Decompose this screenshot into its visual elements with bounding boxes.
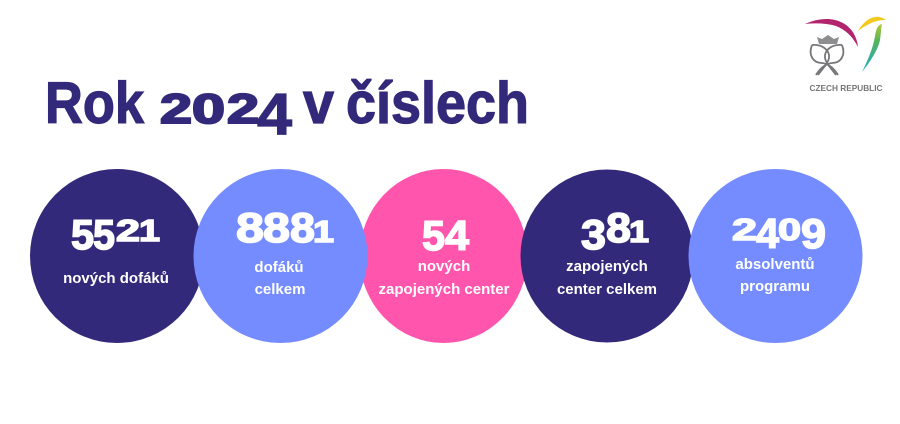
panel: 381 total centres <box>520 170 694 342</box>
title: Rok <box>45 71 145 136</box>
number: 4 <box>445 212 470 259</box>
title <box>45 71 529 147</box>
number: 1 <box>313 214 334 249</box>
icon: crown <box>817 35 839 44</box>
number: 3 <box>581 211 606 258</box>
label: zapojených <box>566 258 648 275</box>
panel: 54 new centres <box>360 169 528 343</box>
title: 4 <box>257 82 292 147</box>
panel: 2409 graduates <box>688 169 862 343</box>
title: v <box>303 71 334 136</box>
panel: 8881 total participants: celkem <box>255 281 305 298</box>
number: 0 <box>778 212 801 247</box>
icon: magenta wing <box>805 19 858 47</box>
logo: Czech Republic <box>805 17 886 93</box>
label: absolventů <box>735 256 815 273</box>
number: 8 <box>290 204 315 251</box>
icon: knot <box>811 45 843 75</box>
panel: 2409 graduates: programu <box>740 278 810 295</box>
number: 5 <box>71 211 94 258</box>
number: 1 <box>629 214 649 249</box>
number: 8 <box>606 204 631 251</box>
number: 5 <box>422 212 445 259</box>
number: 9 <box>801 210 826 257</box>
number: 1 <box>139 213 160 248</box>
number: 8 <box>236 204 264 251</box>
number: 4 <box>756 210 780 257</box>
title: 0 <box>192 85 225 132</box>
number: 2 <box>732 212 757 247</box>
number: 8 <box>263 204 290 251</box>
title: 2 <box>227 85 259 132</box>
panel: 381 total centres: center celkem <box>557 281 657 298</box>
number: 5 <box>93 211 115 258</box>
label: dofáků <box>254 259 304 276</box>
icon: green-blue tail <box>862 24 882 72</box>
panel: 8881 total participants <box>194 169 368 343</box>
logo caption: CZECH REPUBLIC <box>810 83 882 93</box>
title: 2 <box>160 85 192 132</box>
icon: yellow wing <box>858 17 886 31</box>
number: 2 <box>116 213 140 248</box>
title: číslech <box>346 71 529 136</box>
label: nových dofáků <box>63 270 169 287</box>
panel: 54 new centres: zapojených center <box>379 281 510 298</box>
label: nových <box>418 258 470 275</box>
panel: 5521 new participants <box>30 169 204 343</box>
